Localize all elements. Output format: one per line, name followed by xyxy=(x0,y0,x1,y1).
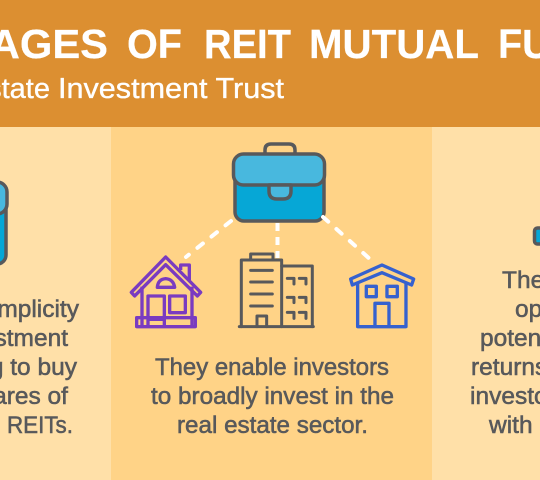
subtitle: Investment Trust xyxy=(58,73,284,105)
title xyxy=(0,21,540,67)
icon: right partial briefcase xyxy=(534,228,540,244)
panel: center column xyxy=(111,127,432,480)
title: MUTUAL xyxy=(309,21,479,67)
icon: purple house xyxy=(131,257,201,327)
text: right column: with xyxy=(488,412,533,439)
connector: dashed lines xyxy=(186,217,371,260)
icon: central briefcase xyxy=(234,144,324,221)
header band xyxy=(0,0,540,127)
title: OF xyxy=(127,21,182,67)
text: center column xyxy=(151,354,394,439)
text: left column: REITs. xyxy=(7,412,73,439)
text: center column: to broadly invest in the xyxy=(151,383,394,410)
panel: left column xyxy=(0,127,111,480)
text: center column: real estate sector. xyxy=(177,412,368,439)
icon: left briefcase xyxy=(0,182,7,264)
text: left column xyxy=(0,296,80,439)
text: right column xyxy=(470,267,540,439)
panel: right column xyxy=(432,127,540,480)
icon: blue house xyxy=(351,265,414,327)
text: center column: They enable investors xyxy=(155,354,389,381)
title: REIT xyxy=(204,21,291,67)
icon: office buildings xyxy=(239,254,313,327)
